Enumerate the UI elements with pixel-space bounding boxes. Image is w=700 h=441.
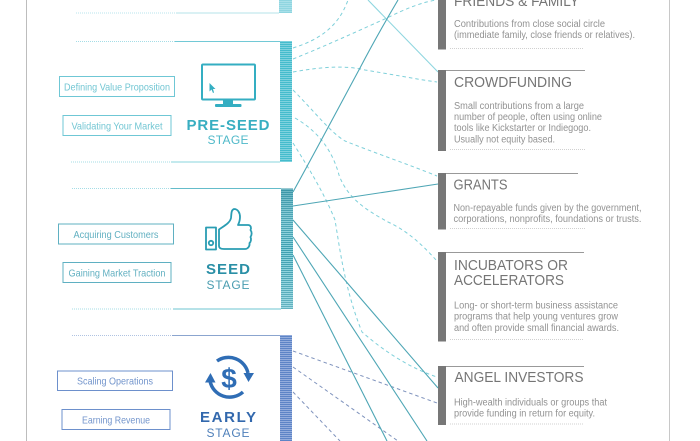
stage title: pre-seed: PRE-SEED — [186, 117, 270, 134]
connector lines — [293, 0, 438, 441]
stage title: early: STAGE — [206, 426, 250, 440]
text: grants description: Non-repayable funds given by the government, — [454, 203, 642, 214]
panel: grants — [438, 173, 642, 230]
box: earning revenue: Earning Revenue — [82, 414, 150, 426]
text: friends and family description: (immediate family, close friends or relatives). — [454, 30, 635, 41]
stage title: seed — [206, 261, 250, 292]
heading: incubators or accelerators: INCUBATORS OR — [454, 257, 568, 274]
text: angel investors description: provide funding in return for equity. — [454, 408, 595, 420]
stage title: seed: SEED — [206, 261, 250, 278]
stage title: pre-seed: STAGE — [208, 133, 248, 147]
text: crowdfunding description — [454, 101, 603, 146]
panel: incubators or accelerators — [438, 252, 619, 342]
panel: friends and family — [438, 0, 635, 50]
icon: dollar cycle — [205, 357, 254, 397]
text: friends and family description — [454, 19, 635, 41]
text: grants description: corporations, nonprofits, foundations or trusts. — [454, 214, 642, 225]
heading: incubators or accelerators — [454, 257, 568, 289]
text: crowdfunding description: Small contributions from a large — [454, 101, 585, 112]
heading: incubators or accelerators: ACCELERATORS — [454, 272, 564, 289]
text: incubators description: programs that help young ventures grow — [454, 312, 619, 322]
box: defining value proposition: Defining Value Proposition — [64, 82, 170, 94]
stage title: pre-seed — [186, 117, 270, 147]
text: incubators description: and often provide small financial awards. — [454, 323, 619, 334]
heading: crowdfunding: CROWDFUNDING — [454, 74, 572, 91]
box: defining value proposition — [60, 76, 174, 96]
box: acquiring customers: Acquiring Customers — [74, 229, 158, 241]
text: crowdfunding description: Usually not equity based. — [454, 134, 555, 146]
box: earning revenue — [62, 410, 170, 430]
heading: grants: GRANTS — [454, 176, 508, 194]
box: scaling operations: Scaling Operations — [77, 376, 153, 388]
box: scaling operations — [58, 371, 172, 390]
text: incubators description: Long- or short-term business assistance — [454, 300, 619, 312]
box: validating your market: Validating Your Market — [72, 120, 163, 132]
panel: seed stage — [58, 188, 293, 309]
panel: top stage remnant — [76, 0, 292, 13]
heading: angel investors: ANGEL INVESTORS — [454, 369, 584, 386]
text: incubators description — [454, 300, 619, 334]
text: friends and family description: Contributions from close social circle — [454, 19, 606, 30]
text: angel investors description — [454, 398, 607, 420]
panel: early stage — [58, 335, 292, 441]
text: grants description — [454, 203, 642, 225]
panel: pre-seed stage — [60, 41, 292, 162]
icon: thumbs up — [206, 209, 252, 250]
box: acquiring customers — [58, 224, 174, 244]
text: crowdfunding description: tools like Kickstarter or Indiegogo. — [454, 123, 591, 134]
box: validating your market — [63, 116, 171, 136]
icon: dollar cycle: $ — [221, 363, 237, 394]
box: gaining market traction — [63, 262, 171, 282]
stage title: seed: STAGE — [206, 278, 250, 292]
text: angel investors description: High-wealth individuals or groups that — [454, 398, 607, 408]
panel: angel investors — [438, 366, 607, 425]
stage title: early: EARLY — [200, 409, 256, 426]
text: crowdfunding description: number of people, often using online — [454, 112, 603, 123]
icon: monitor — [202, 64, 255, 107]
stage title: early — [200, 409, 256, 440]
box: gaining market traction: Gaining Market Traction — [68, 268, 166, 280]
panel: crowdfunding — [438, 70, 603, 151]
